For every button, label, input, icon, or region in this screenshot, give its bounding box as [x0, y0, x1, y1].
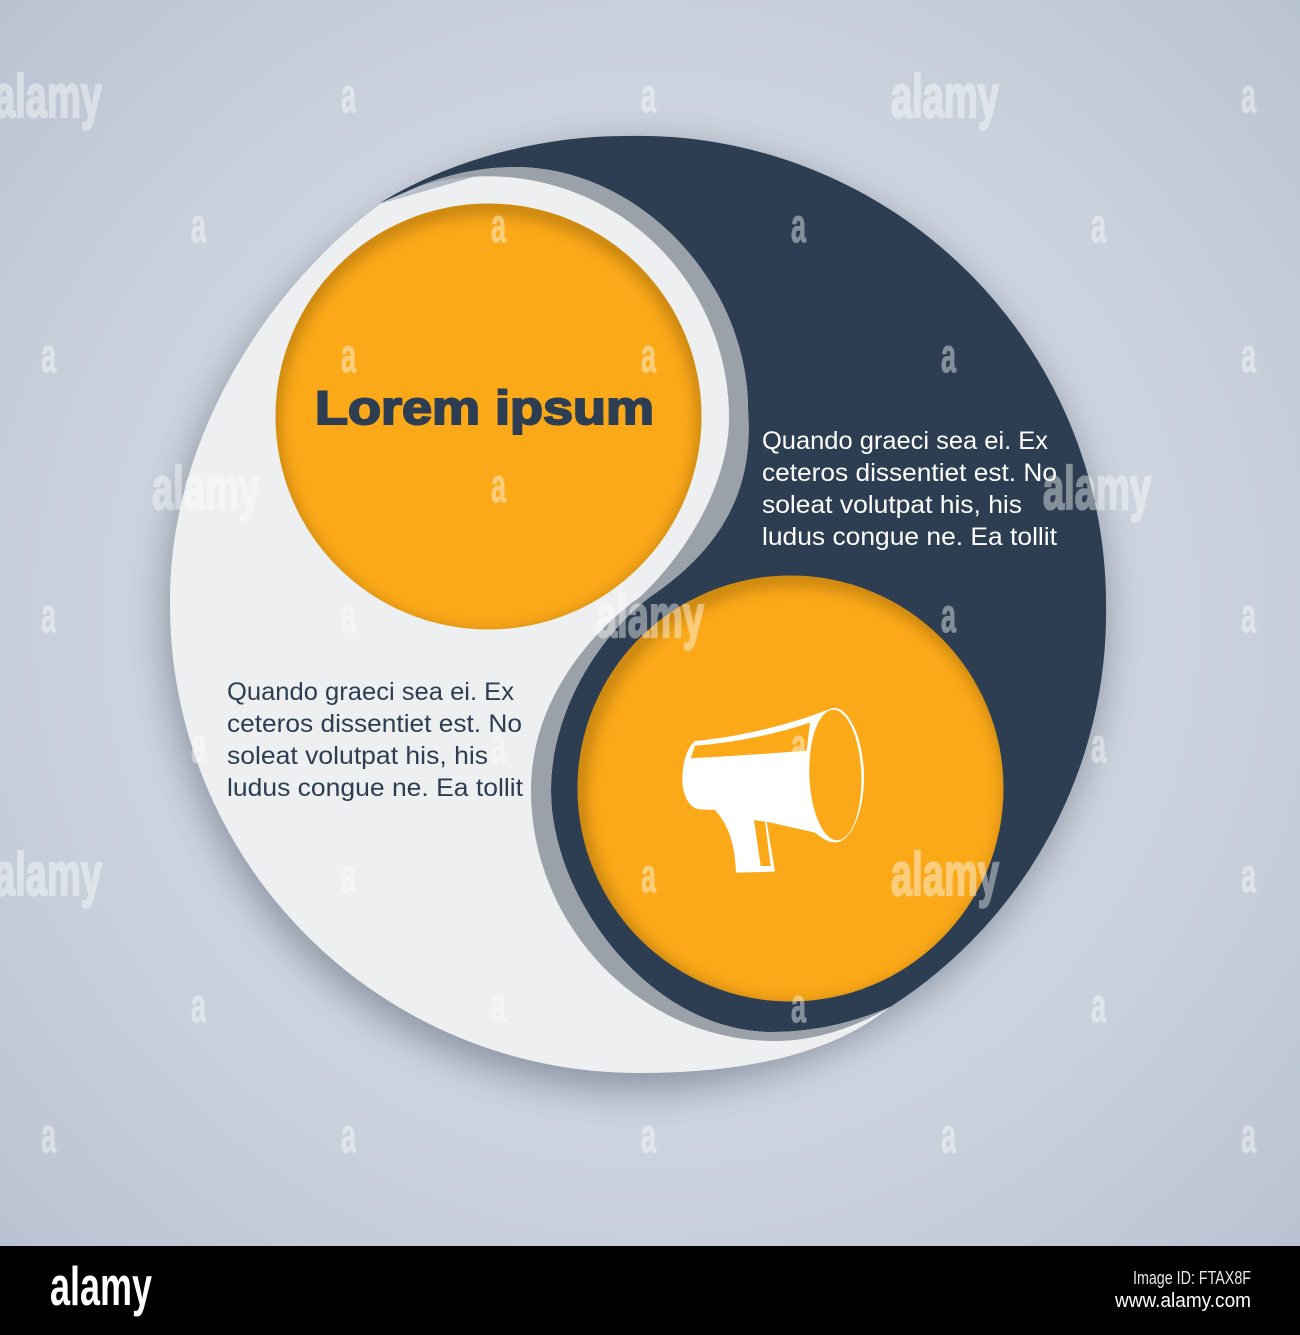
footer bar [0, 1246, 1300, 1335]
watermarks: alamy [891, 841, 999, 908]
watermarks: a [1241, 330, 1256, 383]
watermarks: a [341, 850, 356, 903]
text block: right: ludus congue ne. Ea tollit [762, 523, 1057, 551]
watermarks: a [41, 590, 56, 643]
watermarks: alamy [596, 583, 704, 650]
footer logo: alamy [50, 1255, 152, 1317]
watermarks: a [791, 980, 806, 1033]
orange circle: bottom [578, 576, 1012, 1011]
watermarks: a [641, 330, 656, 383]
footer image id: Image ID: FTAX8F [1133, 1268, 1251, 1288]
watermarks: a [791, 720, 806, 773]
watermarks: a [191, 980, 206, 1033]
watermarks: a [641, 70, 656, 123]
watermarks: a [191, 720, 206, 773]
watermarks: a [341, 70, 356, 123]
text block: left: Quando graeci sea ei. Ex [227, 678, 515, 706]
watermarks: a [1091, 980, 1106, 1033]
watermarks: a [41, 330, 56, 383]
watermarks: alamy [891, 63, 999, 130]
watermarks: a [941, 330, 956, 383]
text block: left [227, 678, 523, 802]
watermarks: a [1241, 1110, 1256, 1163]
watermarks: a [491, 200, 506, 253]
text block: left: ceteros dissentiet est. No [227, 710, 522, 738]
watermarks: a [1241, 590, 1256, 643]
watermarks: a [641, 850, 656, 903]
text block: right: soleat volutpat his, his [762, 491, 1022, 519]
watermarks: a [41, 1110, 56, 1163]
watermarks: a [491, 460, 506, 513]
watermarks: a [191, 200, 206, 253]
watermarks: a [1241, 70, 1256, 123]
watermarks: a [791, 200, 806, 253]
watermarks: a [341, 590, 356, 643]
watermarks: a [341, 330, 356, 383]
footer url: www.alamy.com [1114, 1290, 1251, 1312]
text block: right: Quando graeci sea ei. Ex [762, 427, 1048, 455]
panel: yin-yang disc [170, 136, 1106, 1073]
watermarks: a [941, 1110, 956, 1163]
grey divider band [417, 167, 890, 1041]
icon: megaphone [682, 708, 864, 873]
text block: left: soleat volutpat his, his [227, 742, 488, 770]
orange circle: top [272, 204, 706, 640]
watermarks: a [341, 1110, 356, 1163]
watermarks: a [491, 980, 506, 1033]
light segment [170, 140, 890, 1073]
text block: right [762, 427, 1057, 551]
watermarks: a [1091, 720, 1106, 773]
disc drop shadow [166, 146, 1106, 1090]
watermarks: alamy [152, 455, 260, 522]
watermarks: alamy [1043, 455, 1151, 522]
watermarks [0, 63, 1256, 1163]
watermarks: a [1241, 850, 1256, 903]
watermarks: a [491, 720, 506, 773]
watermarks: a [941, 590, 956, 643]
watermarks: a [641, 1110, 656, 1163]
text block: left: ludus congue ne. Ea tollit [227, 774, 523, 802]
navy segment [380, 136, 1106, 1032]
watermarks: a [1091, 200, 1106, 253]
heading: Lorem ipsum: Lorem ipsum [315, 381, 654, 434]
text block: right: ceteros dissentiet est. No [762, 459, 1057, 487]
